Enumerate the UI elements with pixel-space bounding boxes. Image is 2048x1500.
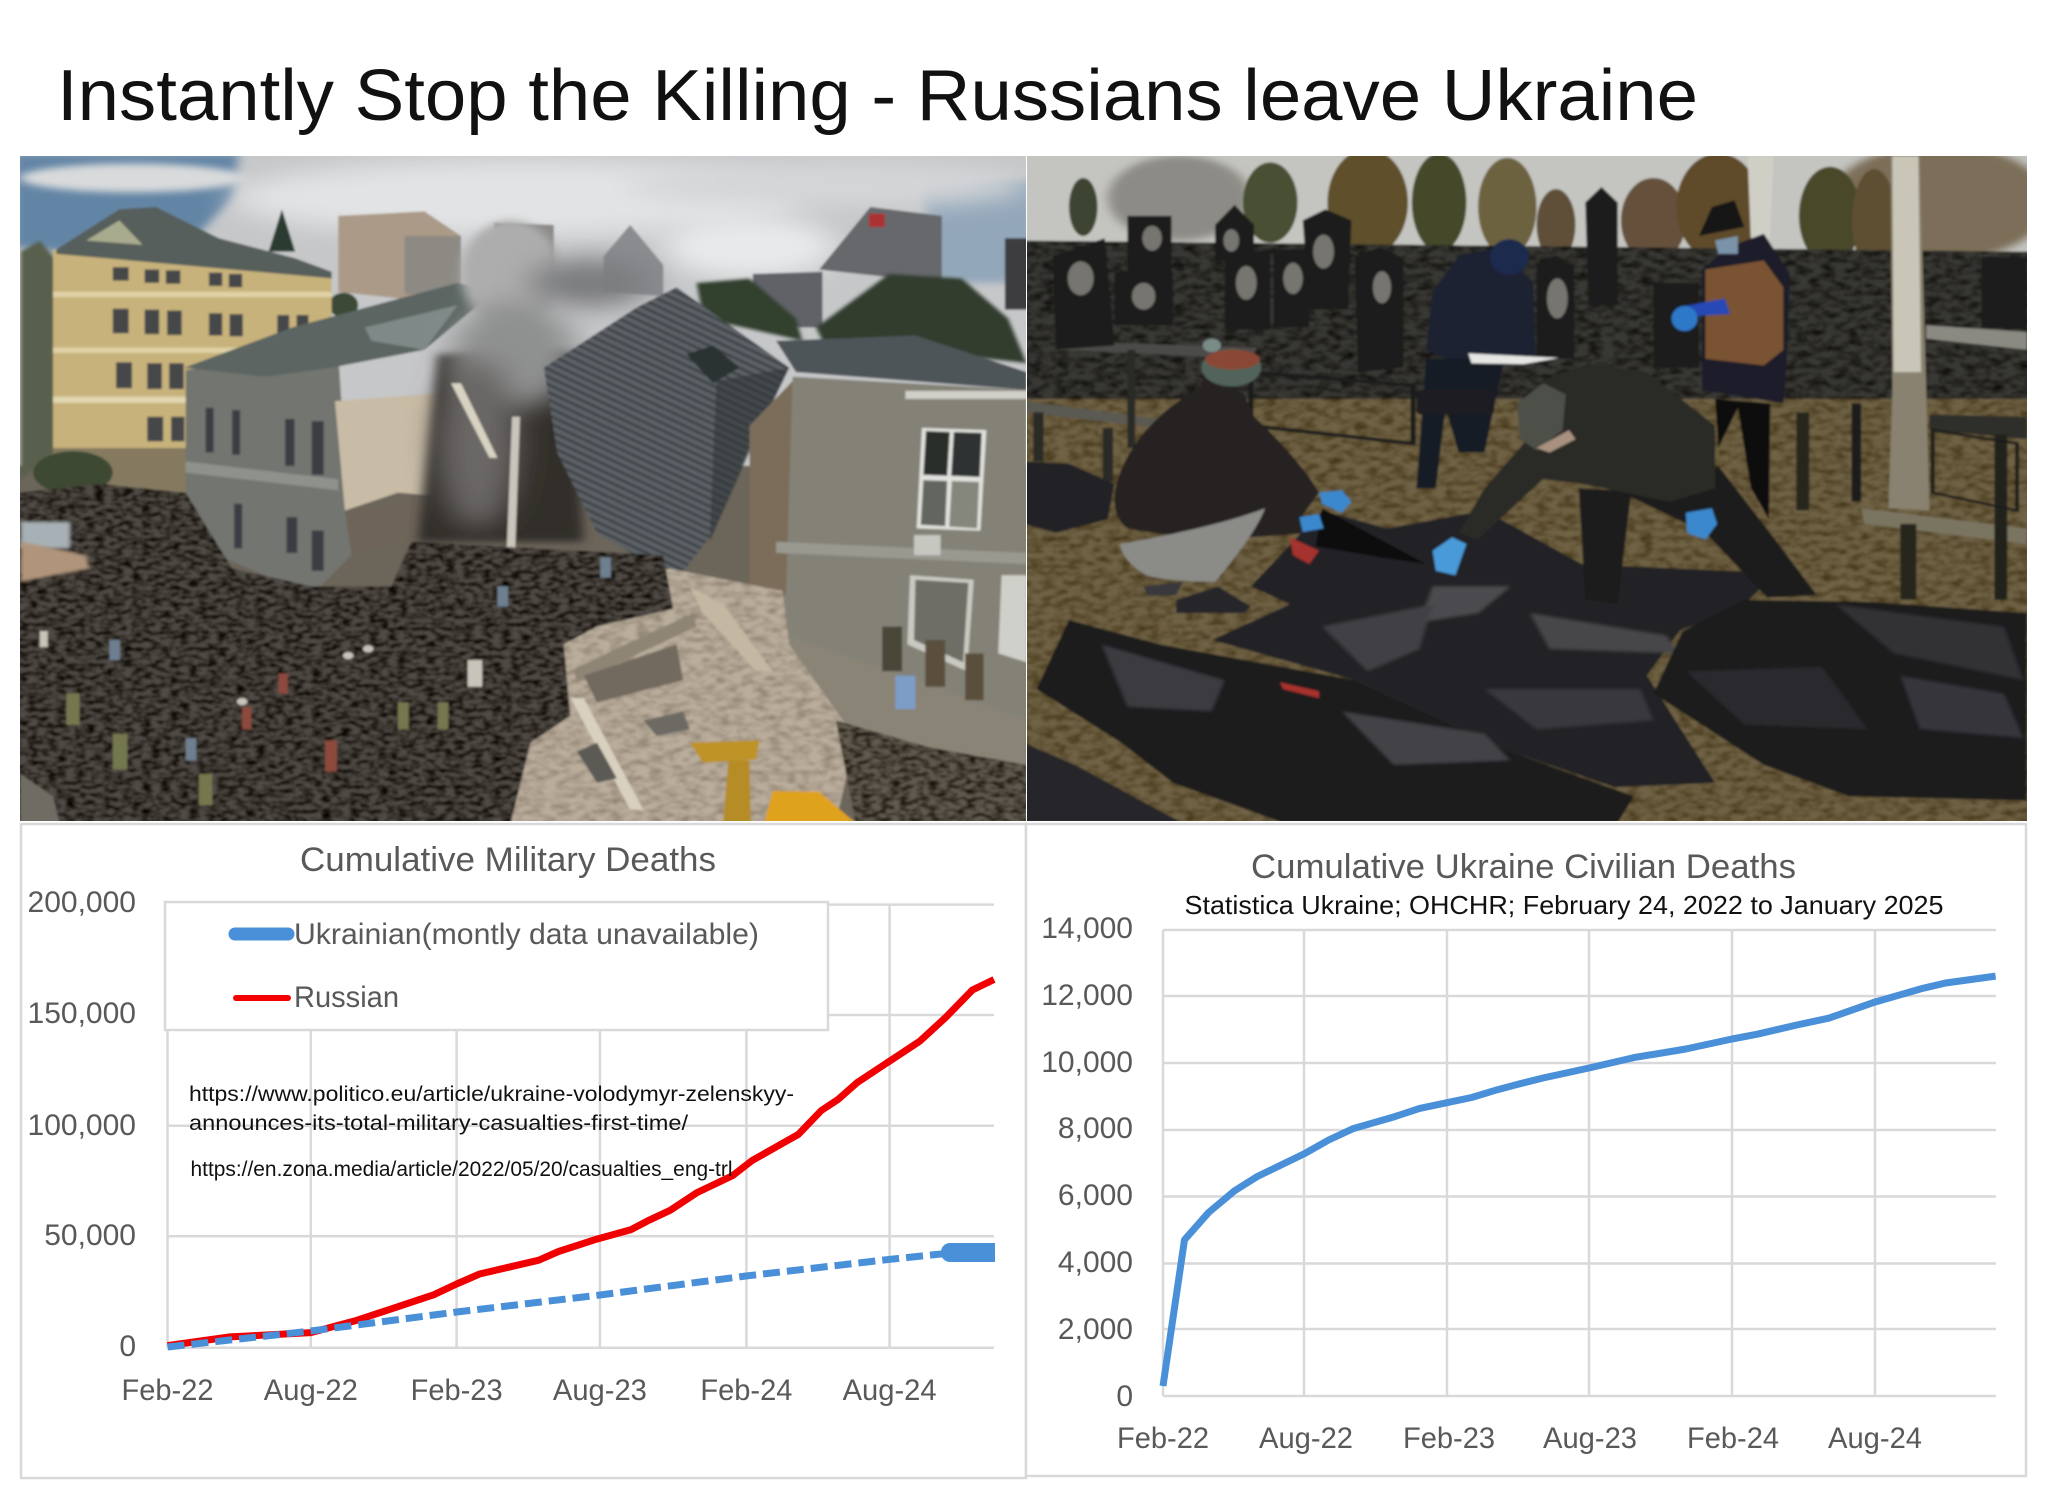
source links	[189, 1083, 794, 1181]
line: Ukrainian deaths, dashed	[168, 1243, 995, 1347]
y axis labels: military: 50,000	[44, 1219, 136, 1252]
source links: https://www.politico.eu/article/ukraine-volodymyr-zelenskyy-	[189, 1083, 794, 1106]
sky	[1027, 156, 2027, 254]
y axis labels: civilian: 6,000	[1058, 1179, 1133, 1212]
source links: announces-its-total-military-casualties-first-time/	[189, 1112, 688, 1135]
x axis labels: civilian: Aug-22	[1259, 1422, 1353, 1455]
x axis labels: civilian: Aug-24	[1828, 1422, 1922, 1455]
police officer writing	[1416, 239, 1559, 488]
source links: https://en.zona.media/article/2022/05/20/casualties_eng-trl	[190, 1158, 732, 1181]
legend key: Ukrainian	[235, 928, 288, 940]
x axis labels: military: Aug-23	[553, 1374, 647, 1407]
legend label: Ukrainian: Ukrainian(montly data unavailable)	[294, 918, 759, 951]
bag at left edge	[1024, 461, 1114, 533]
workers at lower right	[836, 627, 1027, 823]
y axis labels: civilian: 12,000	[1041, 979, 1133, 1012]
y axis labels: civilian: 8,000	[1058, 1112, 1133, 1145]
gravestones	[1053, 187, 2027, 372]
dark blast hole with smoke	[418, 220, 650, 582]
grave portraits	[1068, 226, 1568, 319]
sky and clouds	[13, 153, 1035, 466]
y axis labels: military: 100,000	[28, 1109, 136, 1142]
title: Instantly Stop the Killing - Russians leave Ukraine	[57, 56, 1698, 136]
birch trunks	[1748, 156, 1929, 511]
chart subtitle: data source: Statistica Ukraine; OHCHR; February 24, 2022 to January 2025	[1184, 890, 1944, 920]
x axis labels: military: Feb-23	[411, 1374, 503, 1407]
line: Russian deaths	[168, 980, 994, 1346]
crowd of rescuers and civilians	[13, 484, 673, 823]
x axis labels: civilian: Feb-22	[1117, 1422, 1209, 1455]
collapsed roof	[544, 287, 789, 580]
x axis labels: military	[122, 1374, 937, 1407]
fallen slabs	[570, 586, 773, 810]
x axis labels: civilian: Feb-24	[1687, 1422, 1779, 1455]
ground base	[20, 464, 1026, 821]
person squatting in dark jacket	[1114, 339, 1351, 613]
bottom-left body bag	[1024, 743, 1183, 823]
right wing building	[750, 336, 1028, 774]
chart title: military deaths: Cumulative Military Deaths	[300, 841, 716, 879]
legend label: Russian: Russian	[294, 981, 399, 1014]
x axis labels: military: Aug-24	[843, 1374, 937, 1407]
y axis labels: military: 200,000	[28, 886, 136, 919]
grey path band and table tops	[1024, 325, 2027, 600]
y axis labels: military: 150,000	[28, 997, 136, 1030]
line: civilian deaths	[1163, 976, 1996, 1386]
police officer with clipboard	[1672, 200, 1790, 519]
foreground body bag	[1036, 620, 1634, 823]
x axis labels: civilian	[1117, 1422, 1922, 1455]
background cemetery band	[1027, 239, 2027, 401]
ground	[1024, 399, 2037, 823]
excavator	[690, 740, 856, 823]
background towers and trees	[21, 207, 1038, 479]
x axis labels: military: Feb-22	[122, 1374, 214, 1407]
y axis labels: civilian: 10,000	[1041, 1046, 1133, 1079]
photo: police and workers with body bags at a cemetery	[1024, 144, 2048, 823]
trees	[1069, 144, 2048, 272]
y axis labels: civilian: 4,000	[1058, 1246, 1133, 1279]
y axis labels: civilian: 0	[1116, 1380, 1133, 1413]
x axis labels: military: Feb-24	[700, 1374, 792, 1407]
rubble	[508, 567, 848, 821]
chart title: civilian deaths: Cumulative Ukraine Civilian Deaths	[1251, 848, 1796, 886]
y axis labels: civilian: 14,000	[1041, 912, 1133, 945]
panel: cumulative Ukraine civilian deaths chart	[1026, 824, 2026, 1476]
main grey building, left wing	[184, 283, 494, 595]
legend key: Russian	[236, 995, 288, 1001]
legend	[165, 902, 828, 1030]
right body bag	[1653, 600, 2027, 801]
x axis labels: civilian: Feb-23	[1403, 1422, 1495, 1455]
photo: bombed hospital building with rescuers	[13, 153, 1038, 827]
x axis labels: civilian: Aug-23	[1543, 1422, 1637, 1455]
panel: cumulative military deaths chart	[21, 824, 1026, 1478]
y axis labels: military	[28, 886, 136, 1363]
y axis labels: civilian	[1041, 912, 1133, 1413]
x axis labels: military: Aug-22	[264, 1374, 358, 1407]
y axis labels: civilian: 2,000	[1058, 1313, 1133, 1346]
yellow building	[33, 207, 332, 497]
person bending in dark jacket and cap	[1433, 363, 1817, 604]
central body bags	[1212, 508, 1777, 787]
y axis labels: military: 0	[119, 1330, 136, 1363]
